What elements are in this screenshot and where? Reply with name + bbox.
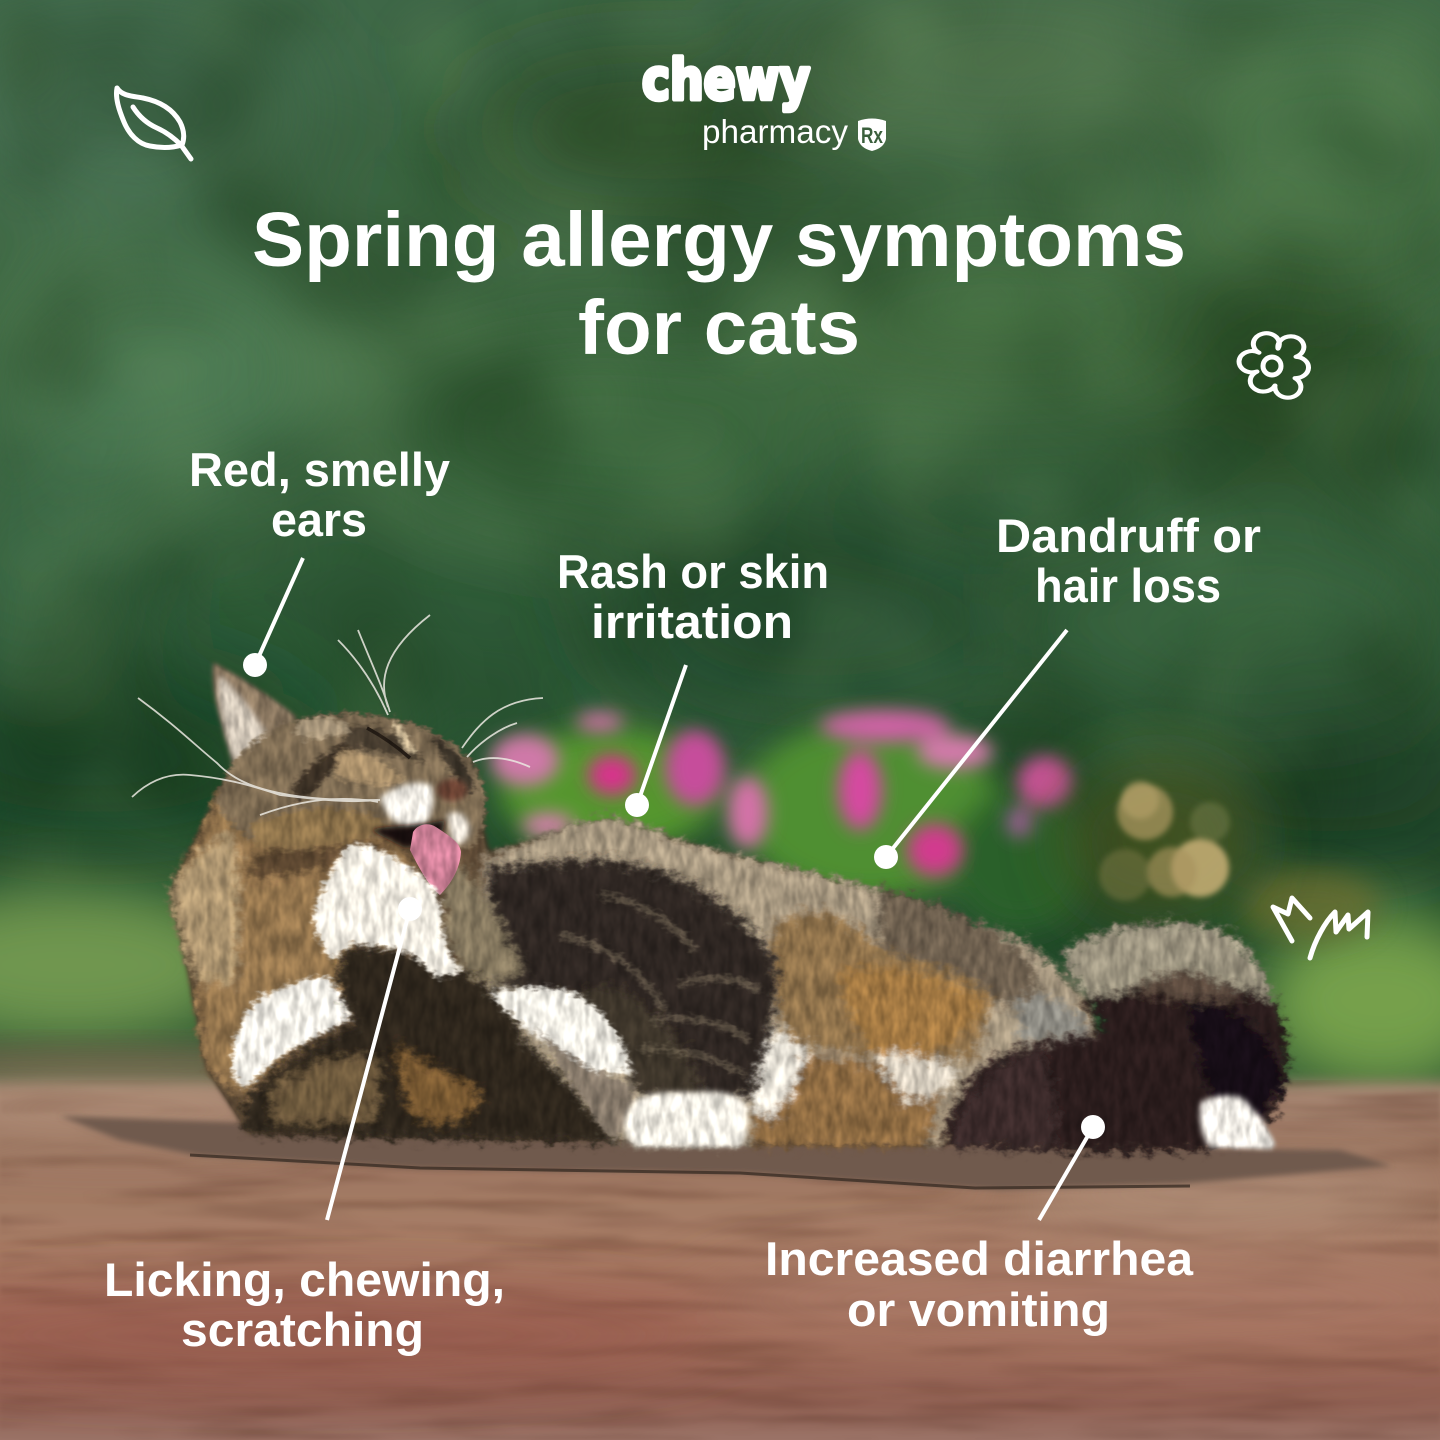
label: increased diarrhea or vomiting xyxy=(765,1232,1194,1336)
cat: mane xyxy=(168,782,525,1100)
ground: brick path xyxy=(0,1082,1440,1440)
cat: dark saddle xyxy=(487,859,777,1098)
label: licking, chewing, scratching: scratching xyxy=(181,1303,424,1356)
title: Spring allergy symptoms xyxy=(252,197,1186,283)
pointer: coat xyxy=(874,630,1067,869)
cat: saddle stripes xyxy=(560,895,760,1075)
pointer: ears xyxy=(243,558,303,677)
label: licking, chewing, scratching xyxy=(104,1253,505,1356)
flower bushes xyxy=(491,710,1090,930)
cat: white belly xyxy=(490,987,635,1142)
label: increased diarrhea or vomiting: Increased diarrhea xyxy=(765,1232,1194,1285)
title: for cats xyxy=(578,285,860,371)
cat: white muzzle and nose xyxy=(370,779,470,848)
cat: head xyxy=(215,712,487,850)
cat: closed eye xyxy=(367,728,410,758)
cat: front white paw xyxy=(625,1092,747,1148)
pointer: skin xyxy=(625,665,686,817)
label: red, smelly ears: Red, smelly xyxy=(189,443,450,496)
logo Rx shield: Rx xyxy=(861,123,884,148)
label: dandruff or hair loss xyxy=(996,509,1261,612)
cat: raised white paw xyxy=(313,845,462,978)
bokeh lights xyxy=(1060,760,1260,920)
cat: tail white tip xyxy=(1200,1096,1277,1151)
photo background: blurred garden foliage xyxy=(0,0,1440,1100)
label: increased diarrhea or vomiting: or vomiting xyxy=(847,1283,1110,1336)
icon: grass scribble xyxy=(1273,898,1368,958)
cat: base silhouette xyxy=(170,720,1100,1147)
doormat under cat xyxy=(60,1116,1392,1190)
pointer: rear xyxy=(1039,1115,1105,1220)
logo wordmark: chewy xyxy=(642,48,810,113)
title xyxy=(252,197,1186,371)
cat: tail xyxy=(944,920,1290,1153)
cat: dark foreleg and lower body xyxy=(243,947,620,1145)
logo sub-brand: pharmacy xyxy=(702,113,849,150)
pointer: paw xyxy=(327,897,422,1220)
logo Rx shield xyxy=(858,118,886,151)
cat whiskers xyxy=(132,615,543,815)
label: rash or skin irritation xyxy=(557,545,829,648)
cat: ear xyxy=(211,660,298,768)
label: red, smelly ears xyxy=(189,443,450,546)
label: dandruff or hair loss: hair loss xyxy=(1035,559,1221,612)
label: licking, chewing, scratching: Licking, chewing, xyxy=(104,1253,505,1306)
cat: tongue xyxy=(410,824,461,895)
label: red, smelly ears: ears xyxy=(271,493,367,546)
cat illustration xyxy=(168,660,1290,1153)
grass left and right xyxy=(0,869,1440,1085)
label: rash or skin irritation: irritation xyxy=(591,595,793,648)
cat: white chest xyxy=(232,977,354,1090)
logo: chewy pharmacy xyxy=(642,48,886,151)
icon: leaf xyxy=(116,88,191,159)
label: dandruff or hair loss: Dandruff or xyxy=(996,509,1261,562)
cat: torso xyxy=(470,815,1095,1148)
label: rash or skin irritation: Rash or skin xyxy=(557,545,829,598)
icon: flower xyxy=(1239,333,1309,398)
